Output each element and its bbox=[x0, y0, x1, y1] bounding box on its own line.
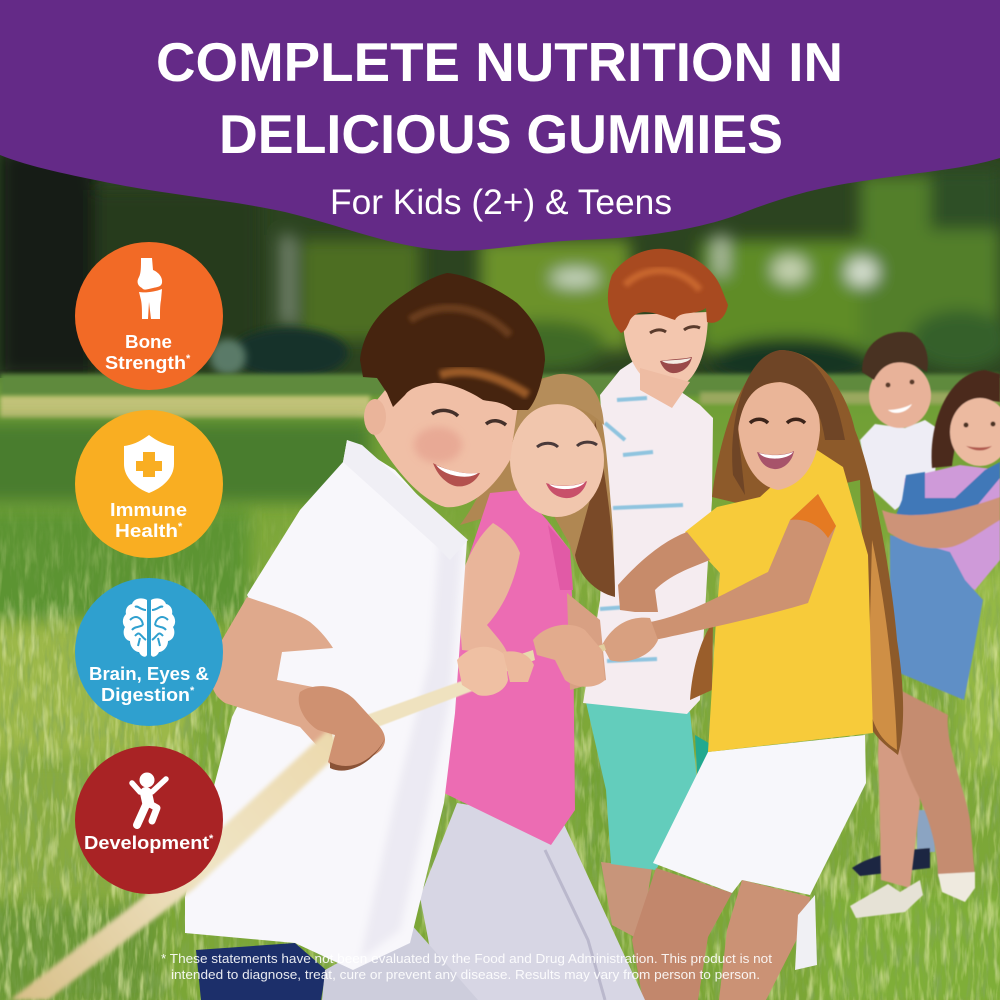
pink girl hand bbox=[533, 625, 605, 687]
leg bbox=[601, 862, 652, 940]
hair bbox=[360, 273, 545, 410]
head bbox=[623, 312, 708, 390]
red hair bbox=[608, 249, 728, 333]
mouth bbox=[546, 481, 587, 498]
mouth bbox=[660, 357, 692, 373]
front boy far hand bbox=[457, 647, 508, 696]
kid: far right boy in white shirt bbox=[852, 332, 937, 876]
eyes bbox=[537, 442, 597, 447]
kid: front boy in white polo bbox=[185, 273, 545, 1000]
cheek bbox=[414, 427, 462, 463]
kid: girl in yellow shirt bbox=[602, 350, 903, 1000]
head bbox=[373, 372, 518, 507]
far arm bbox=[618, 532, 710, 612]
mouth bbox=[757, 451, 794, 469]
disclaimer: intended to diagnose, treat, cure or prevent any disease. Results may vary from person to person. bbox=[171, 967, 760, 982]
label: * bbox=[209, 833, 214, 845]
eyes bbox=[650, 327, 700, 333]
hair bbox=[932, 370, 1000, 468]
title bbox=[156, 31, 843, 165]
ear bbox=[364, 399, 386, 435]
polo shading bbox=[360, 530, 462, 960]
arm bbox=[882, 497, 1000, 548]
front hair bbox=[732, 350, 845, 495]
teal shorts bbox=[695, 735, 712, 790]
white pants bbox=[420, 803, 645, 1000]
icon: jumping child bbox=[132, 772, 166, 825]
kid: red-haired boy in striped shirt bbox=[583, 249, 728, 940]
badge: brain, eyes and digestion bbox=[75, 578, 223, 726]
icon: knee joint bbox=[138, 258, 162, 319]
hands gripping the rope bbox=[299, 625, 605, 771]
arm bbox=[211, 597, 335, 760]
near arm bbox=[650, 494, 836, 640]
white polo bbox=[185, 440, 467, 970]
legs bbox=[878, 695, 920, 888]
jeans bbox=[196, 943, 326, 1000]
badge: bone strength bbox=[75, 242, 223, 390]
far arm bbox=[567, 593, 606, 690]
disclaimer: * These statements have not been evaluated by the Food and Drug Administration. This product is not bbox=[161, 951, 772, 966]
eyes bbox=[432, 410, 506, 425]
lilac shirt bbox=[898, 465, 1000, 590]
legs bbox=[632, 868, 732, 1000]
head bbox=[738, 382, 820, 490]
label: Bone bbox=[125, 332, 172, 352]
label: * bbox=[186, 353, 191, 365]
label: Brain, Eyes & bbox=[89, 664, 209, 684]
kid: far right girl in overalls bbox=[850, 370, 1000, 918]
label: Strength bbox=[105, 353, 186, 373]
label: * bbox=[178, 521, 183, 533]
badge: development bbox=[75, 746, 223, 894]
mouth bbox=[433, 463, 480, 486]
head bbox=[510, 403, 604, 517]
pink shirt bbox=[444, 490, 575, 845]
label: Health bbox=[115, 521, 178, 541]
rope bbox=[10, 644, 606, 1000]
title: COMPLETE NUTRITION IN bbox=[156, 31, 843, 93]
sandals bbox=[850, 880, 923, 918]
label: Immune bbox=[110, 500, 187, 520]
front boy near hand bbox=[299, 686, 385, 768]
bangs bbox=[512, 374, 604, 445]
title: DELICIOUS GUMMIES bbox=[219, 103, 783, 165]
hair behind bbox=[712, 350, 903, 755]
label bbox=[89, 664, 209, 705]
icon: shield with cross bbox=[124, 435, 174, 493]
kid: girl in pink shirt bbox=[420, 374, 645, 1000]
subtitle: For Kids (2+) & Teens bbox=[330, 183, 672, 222]
hand bbox=[602, 618, 658, 662]
label bbox=[110, 500, 187, 541]
label: Development bbox=[84, 833, 209, 853]
label: * bbox=[190, 685, 195, 697]
label: Digestion bbox=[101, 685, 190, 705]
white shorts bbox=[653, 735, 866, 895]
collar bbox=[343, 440, 468, 560]
icon: brain bbox=[123, 598, 175, 657]
purple banner with wavy lower edge bbox=[0, 0, 1000, 251]
blue stripes bbox=[600, 398, 683, 661]
hair behind bbox=[460, 375, 615, 595]
yellow shirt bbox=[685, 450, 873, 752]
label bbox=[105, 332, 191, 373]
head bbox=[950, 398, 1000, 466]
striped shirt bbox=[583, 360, 713, 714]
neck bbox=[640, 368, 690, 408]
arm bbox=[459, 523, 520, 655]
badge: immune health bbox=[75, 410, 223, 558]
eyes bbox=[750, 419, 805, 423]
denim overalls bbox=[890, 535, 983, 700]
